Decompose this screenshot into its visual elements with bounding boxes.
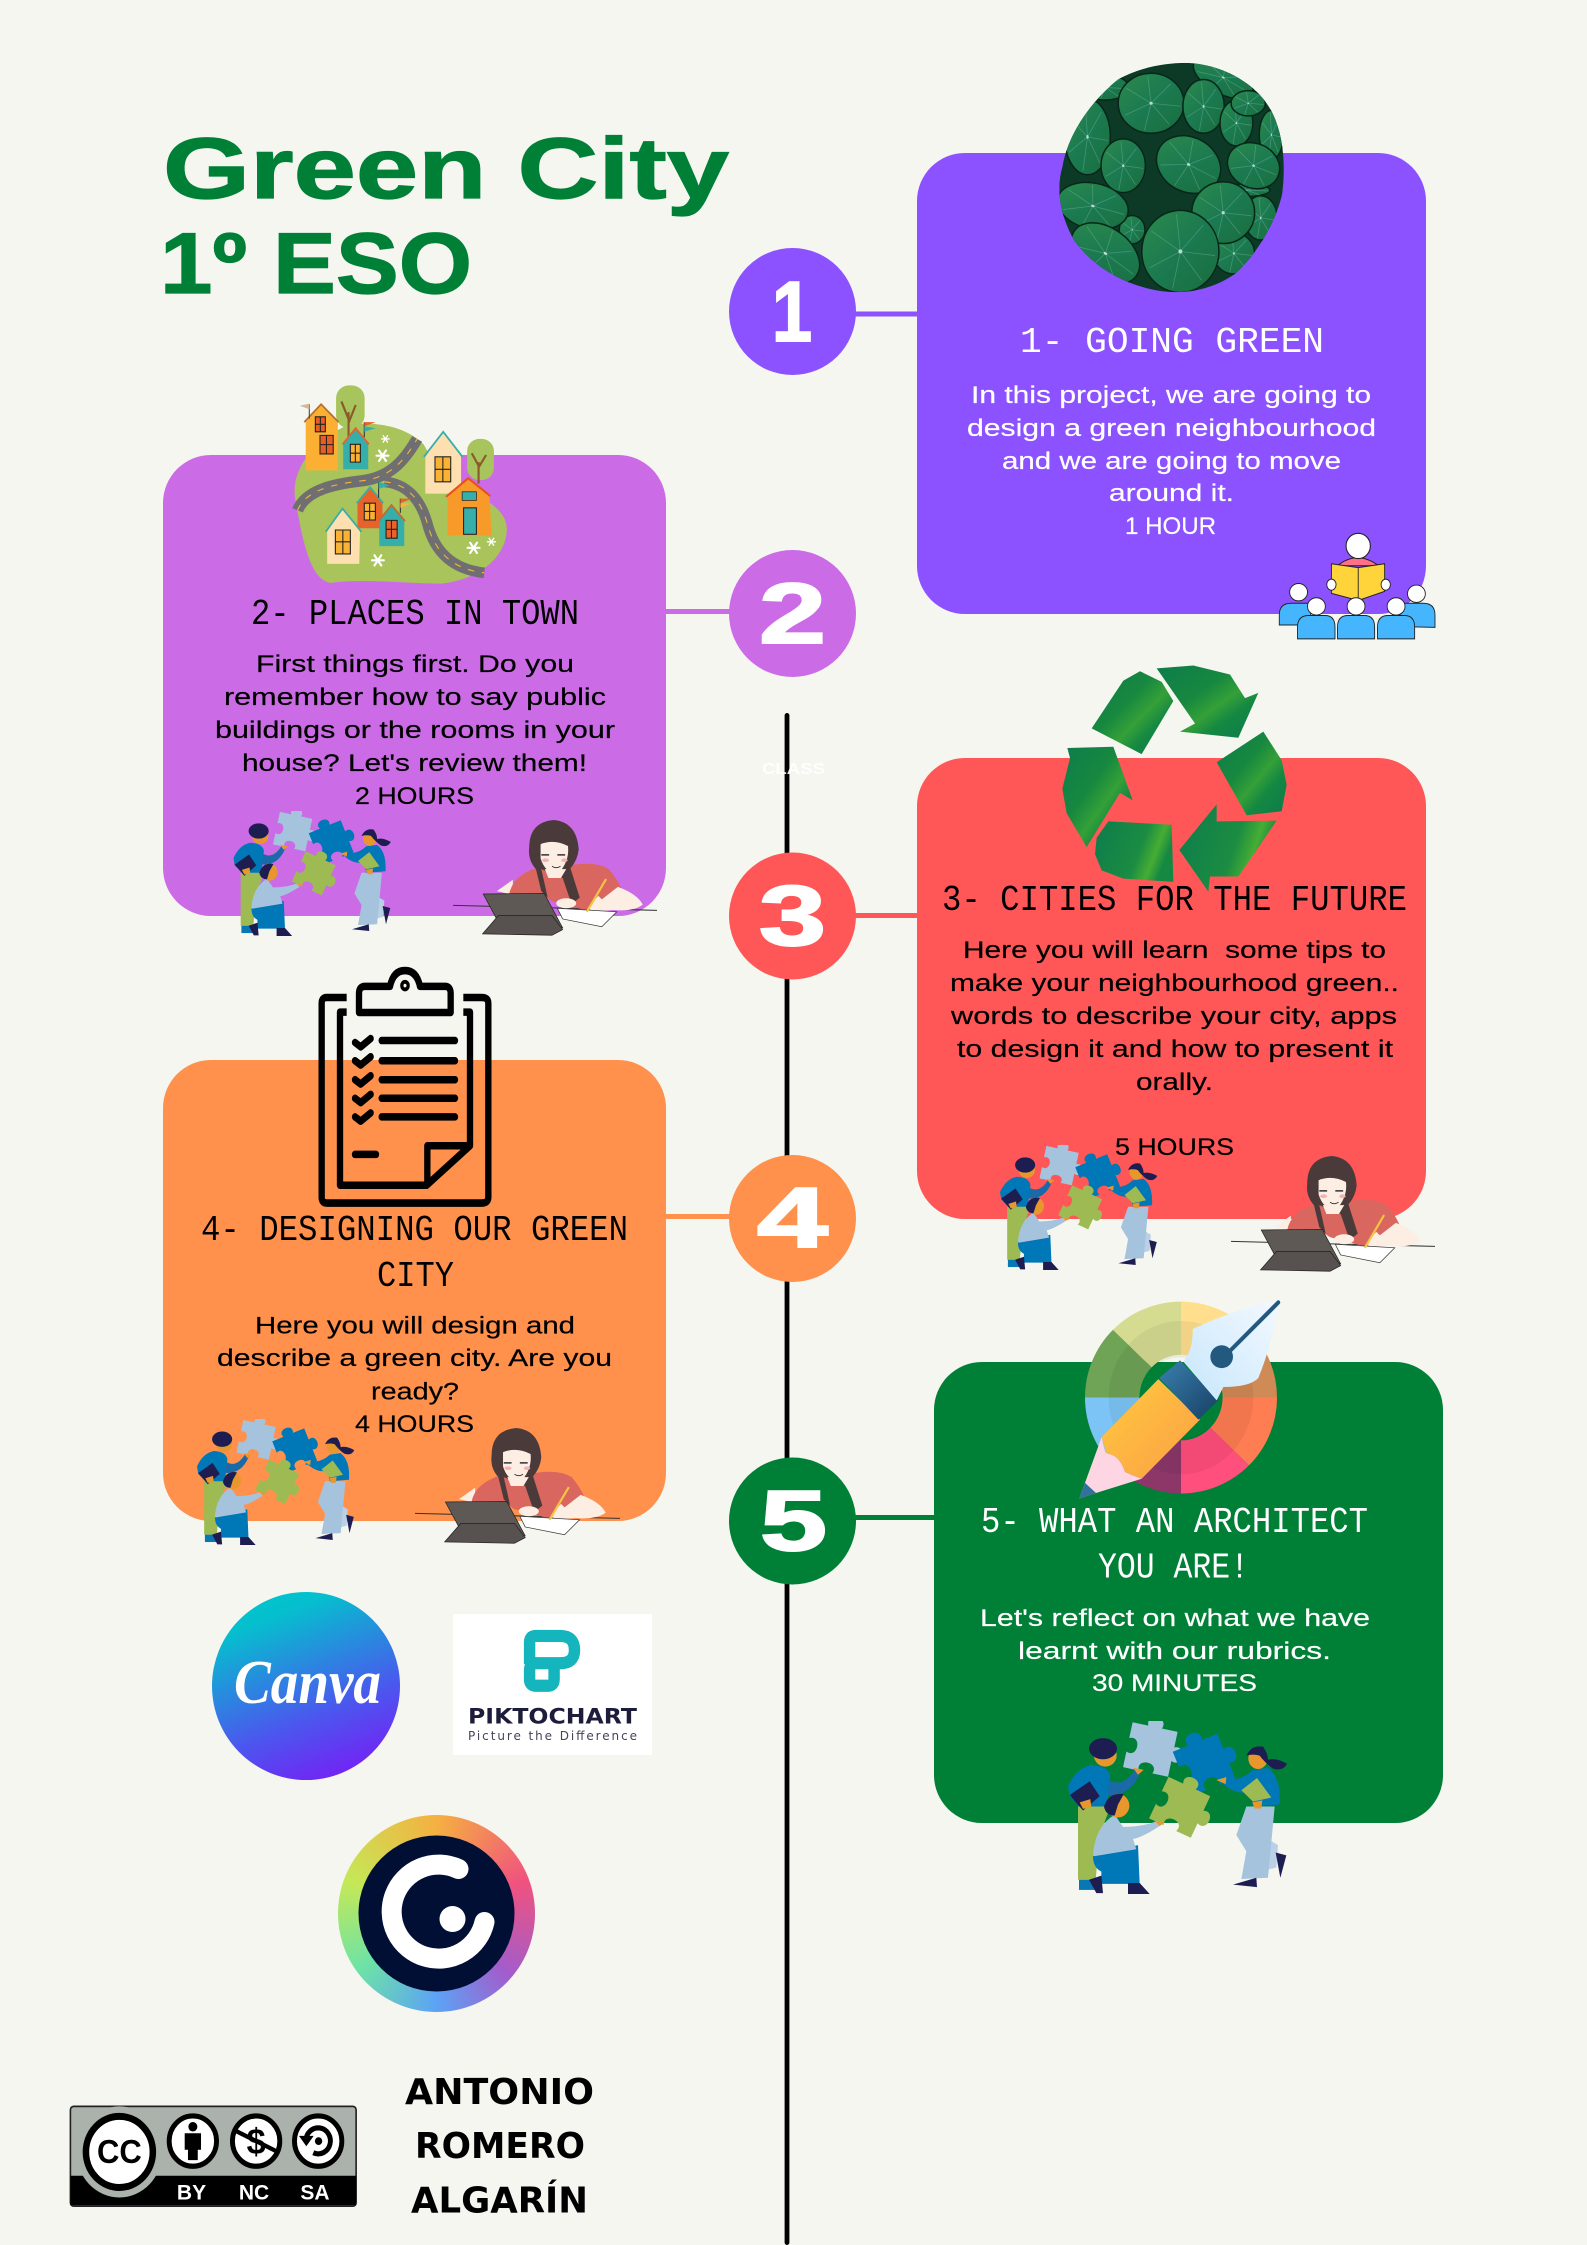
title: Green City — [163, 121, 729, 217]
connector 2 — [660, 609, 735, 614]
heading 2: 2- PLACES IN TOWN — [251, 594, 579, 635]
step 2 number circle — [729, 550, 856, 677]
card background 1 — [917, 153, 1426, 614]
body text 1: design a green neighbourhood — [967, 415, 1376, 442]
logo: Creative Commons BY-NC-SA badge: CC — [97, 2133, 142, 2170]
panel: step 2 places in town — [163, 385, 666, 936]
author name: ALGARÍN — [411, 2180, 588, 2222]
body text 3: to design it and how to present it — [957, 1036, 1393, 1063]
heading 4: CITY — [377, 1256, 454, 1297]
icon: recycling arrows — [1062, 666, 1287, 892]
body text 5: learnt with our rubrics. — [1018, 1638, 1331, 1665]
step 1 number circle — [729, 248, 856, 375]
logo: Genially — [338, 1815, 534, 2012]
icon: clipboard checklist — [322, 971, 488, 1203]
step 5 number circle: 5 — [760, 1474, 827, 1569]
step 5 number circle — [729, 1458, 856, 1584]
heading 3: 3- CITIES FOR THE FUTURE — [942, 880, 1407, 921]
author name: ROMERO — [415, 2126, 585, 2167]
body text 2: 2 HOURS — [355, 783, 474, 810]
illustration: people with puzzle — [1000, 1139, 1157, 1270]
logo: Piktochart: Picture the Difference — [468, 1729, 637, 1743]
logo: Canva: Canva — [234, 1649, 381, 1717]
illustration: people with puzzle — [1068, 1713, 1287, 1894]
step 2 number circle: 2 — [759, 567, 826, 662]
icon: colour wheel with pencil and pen — [1079, 1300, 1279, 1498]
connector 3 — [850, 913, 920, 918]
logo: Creative Commons BY-NC-SA badge: SA — [300, 2182, 330, 2204]
illustration: girl studying — [415, 1428, 620, 1543]
body text 2 — [215, 651, 615, 810]
body text 3 — [950, 937, 1399, 1161]
photo: leaves blob — [1059, 62, 1284, 292]
logo: Piktochart: PIKTOCHART — [468, 1704, 638, 1728]
icon: village map — [295, 385, 507, 584]
logo: Creative Commons BY-NC-SA badge — [70, 2106, 356, 2206]
heading 5: YOU ARE! — [1098, 1548, 1249, 1588]
body text 1: 1 HOUR — [1125, 513, 1216, 540]
body text 4: Here you will design and — [255, 1312, 575, 1340]
heading 4: 4- DESIGNING OUR GREEN — [201, 1210, 628, 1251]
card background 4 — [163, 1060, 666, 1521]
step 4 number circle — [729, 1155, 856, 1282]
heading 4 — [201, 1210, 628, 1297]
title: 1º ESO — [160, 216, 472, 312]
body text 4: 4 HOURS — [355, 1411, 474, 1438]
body text 2: remember how to say public — [224, 684, 606, 711]
body text 1: In this project, we are going to — [971, 382, 1371, 409]
body text 2: house? Let's review them! — [242, 750, 587, 777]
body text 3: orally. — [1136, 1069, 1213, 1096]
author name — [405, 2072, 594, 2222]
logo: Piktochart — [453, 1614, 652, 1755]
body text 5 — [980, 1605, 1370, 1697]
body text 3: Here you will learn some tips to — [963, 937, 1386, 964]
body text 4: describe a green city. Are you — [217, 1345, 612, 1372]
body text 4 — [217, 1312, 612, 1438]
logo: Creative Commons BY-NC-SA badge: $ — [247, 2122, 266, 2162]
step 1 number circle: 1 — [772, 265, 812, 360]
logo: Creative Commons BY-NC-SA badge: NC — [239, 2182, 269, 2204]
connector 1 — [850, 312, 920, 316]
step 3 number circle: 3 — [759, 869, 826, 964]
body text 5: Let's reflect on what we have — [980, 1605, 1370, 1632]
body text 3: words to describe your city, apps — [950, 1003, 1397, 1030]
card background 2 — [163, 455, 666, 916]
card background 5 — [934, 1362, 1443, 1823]
panel: step 5 what an architect you are — [934, 1300, 1443, 1894]
timeline line — [785, 713, 789, 2245]
body text 3: 5 HOURS — [1115, 1134, 1234, 1161]
illustration: girl studying — [453, 820, 657, 935]
connector 4 — [660, 1214, 735, 1219]
body text 5: 30 MINUTES — [1092, 1670, 1257, 1697]
body text 2: buildings or the rooms in your — [215, 717, 615, 744]
step 4 number circle: 4 — [757, 1171, 828, 1266]
body text 1: around it. — [1109, 480, 1234, 507]
body text 1: and we are going to move — [1002, 448, 1341, 475]
illustration: people with puzzle — [234, 805, 391, 936]
body text 2: First things first. Do you — [256, 651, 574, 678]
panel: step 1 going green — [917, 47, 1435, 639]
panel: step 3 cities for the future — [917, 666, 1435, 1271]
faint class label: CLASS — [762, 761, 825, 778]
logo: Creative Commons BY-NC-SA badge: BY — [177, 2182, 206, 2204]
heading 1: 1- GOING GREEN — [1020, 322, 1324, 363]
logo: Canva — [212, 1592, 400, 1780]
step 3 number circle — [729, 852, 856, 980]
body text 3: make your neighbourhood green.. — [950, 970, 1399, 997]
body text 4: ready? — [371, 1378, 459, 1406]
author name: ANTONIO — [405, 2072, 594, 2113]
card background 3 — [917, 758, 1426, 1219]
illustration: girl studying — [1231, 1156, 1435, 1271]
illustration: people with puzzle — [197, 1413, 354, 1545]
heading 5: 5- WHAT AN ARCHITECT — [981, 1502, 1368, 1543]
body text 1 — [967, 382, 1376, 540]
panel: step 4 designing our green city — [163, 971, 666, 1545]
title — [160, 121, 729, 312]
icon: teacher reading to students — [1279, 533, 1435, 639]
heading 5 — [981, 1502, 1368, 1588]
connector 5 — [850, 1515, 940, 1520]
